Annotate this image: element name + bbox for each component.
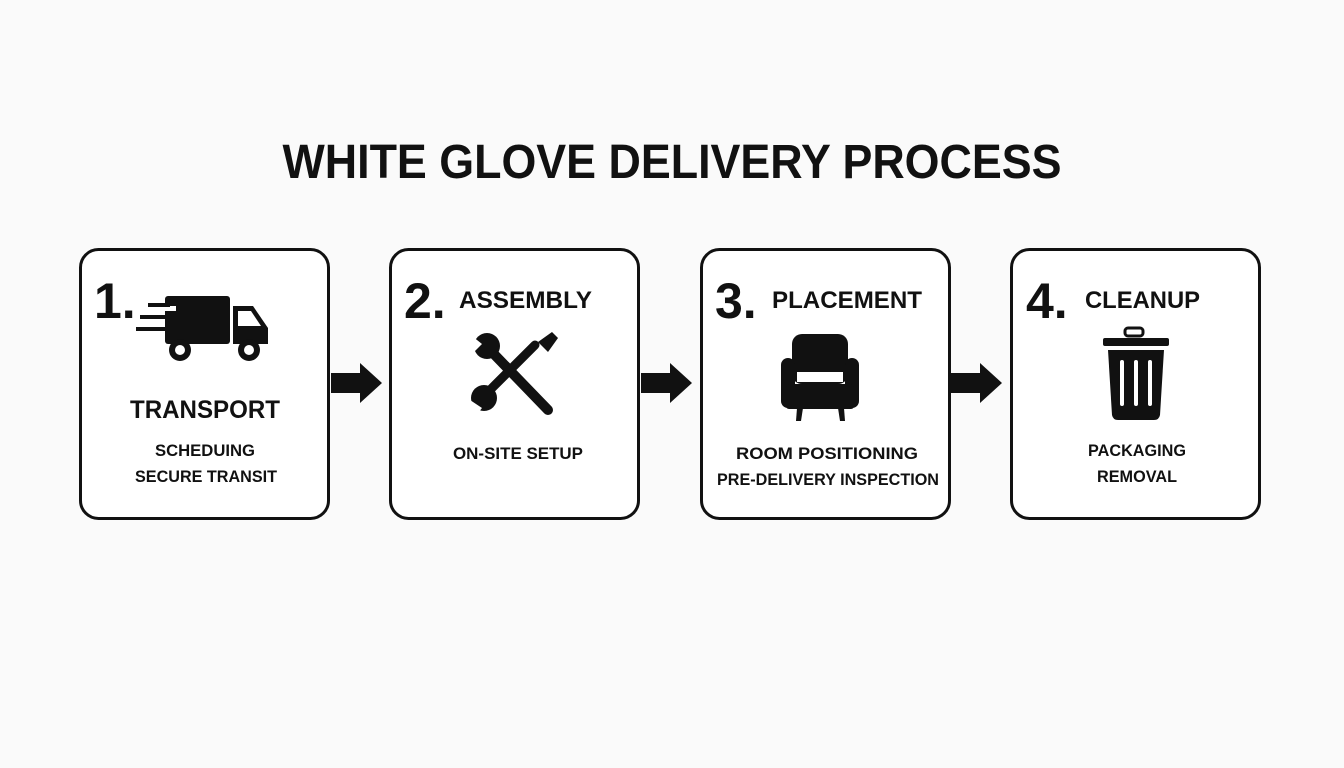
title: WHITE GLOVE DELIVERY PROCESS: [282, 136, 1062, 189]
panel: placement: PRE-DELIVERY INSPECTION: [717, 470, 939, 489]
heading: assembly: ASSEMBLY: [459, 287, 592, 314]
arrow 2: [641, 363, 692, 403]
text: assembly details: ON-SITE SETUP: [453, 444, 583, 463]
icon: armchair: [781, 334, 859, 421]
panel: cleanup: [1012, 250, 1260, 518]
panel: assembly: [390, 250, 638, 518]
text: cleanup details: PACKAGING: [1088, 441, 1186, 460]
panel: placement: [702, 250, 950, 518]
panel: transport: SECURE TRANSIT: [135, 467, 278, 486]
text: transport details: SCHEDUING: [155, 441, 255, 460]
arrow 1: [331, 363, 382, 403]
panel: cleanup: REMOVAL: [1097, 467, 1177, 486]
step number 1: 1.: [94, 273, 136, 329]
step number 3: 3.: [715, 273, 757, 329]
heading: transport: TRANSPORT: [130, 396, 280, 424]
icon: truck: [136, 296, 268, 361]
icon: wrench and screwdriver: [470, 332, 558, 418]
panel: transport: [80, 250, 328, 518]
heading: placement: PLACEMENT: [772, 287, 922, 314]
icon: trash can: [1103, 328, 1169, 420]
text: placement details: ROOM POSITIONING: [736, 444, 918, 463]
step number 2: 2.: [404, 273, 446, 329]
heading: cleanup: CLEANUP: [1085, 287, 1200, 314]
step number 4: 4.: [1026, 273, 1068, 329]
arrow 3: [951, 363, 1002, 403]
